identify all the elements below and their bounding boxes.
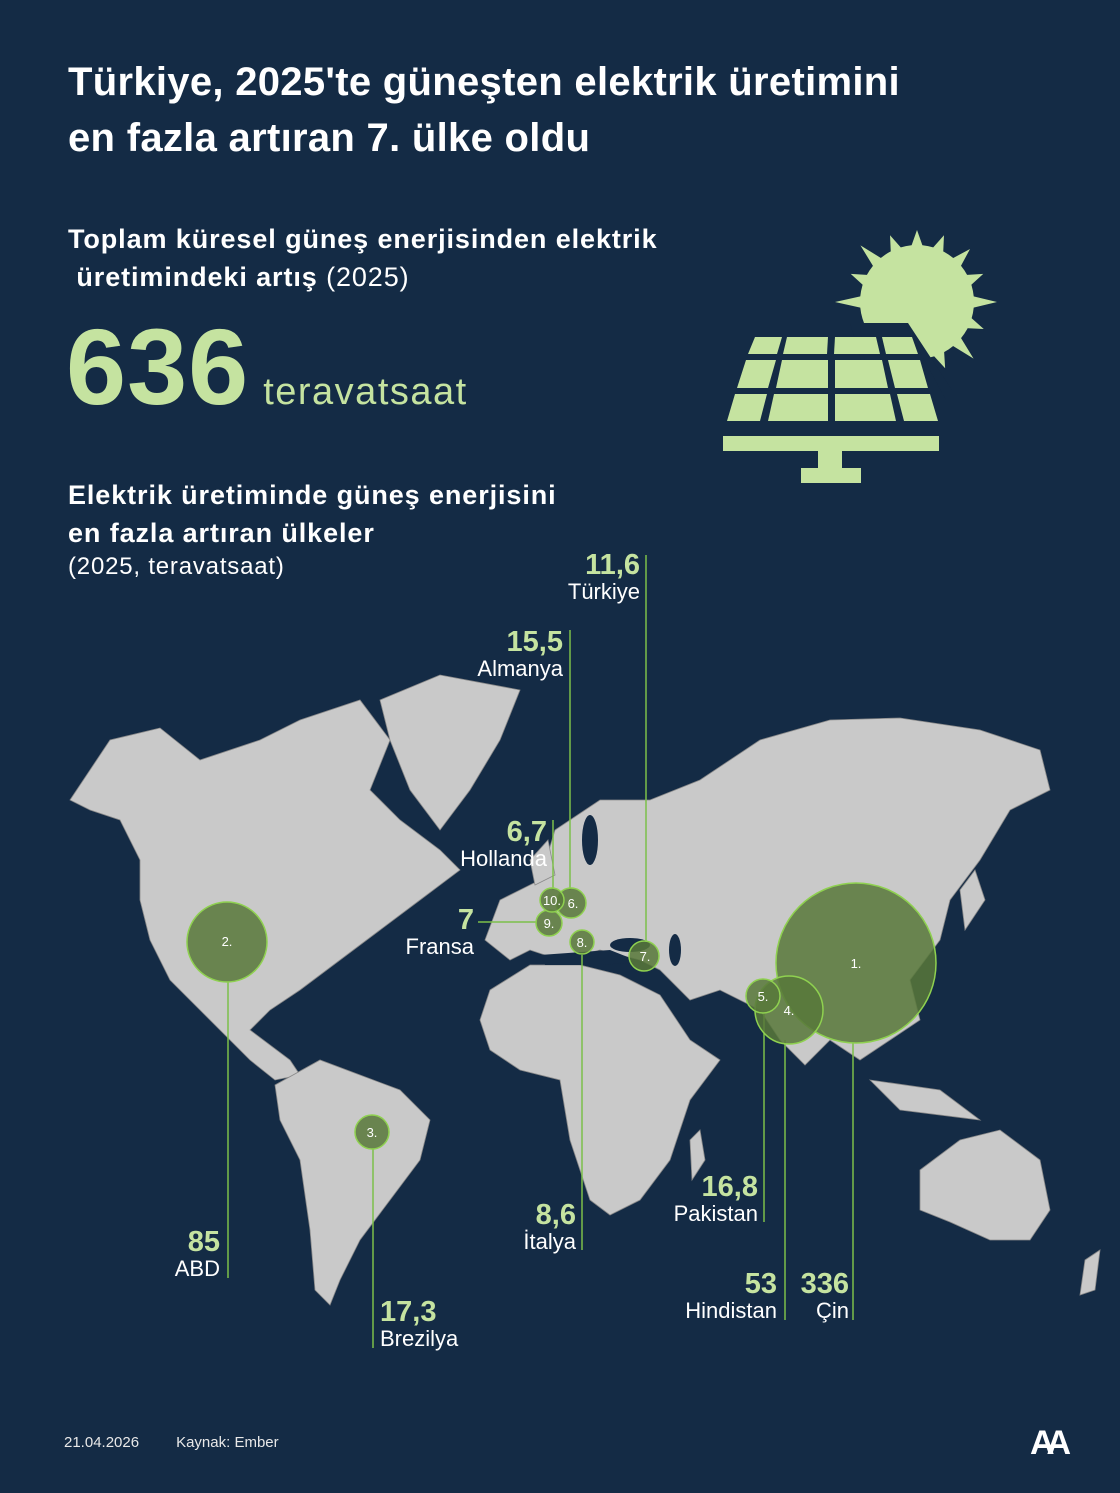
label: Pakistan bbox=[674, 1171, 758, 1226]
label: Hindistan: 53 bbox=[745, 1268, 777, 1300]
leader lines: 10. bbox=[543, 893, 561, 908]
label: Fransa: 7 bbox=[458, 904, 474, 936]
label: Fransa bbox=[406, 904, 474, 959]
label: ABD bbox=[174, 1226, 220, 1281]
subtitle: countries: Elektrik üretiminde güneş enerjisini bbox=[68, 480, 557, 510]
text: (2025, teravatsaat) bbox=[68, 553, 285, 580]
leader lines: 1. bbox=[851, 956, 861, 971]
leader lines: 6. bbox=[568, 896, 578, 911]
icon: AA logo: AA bbox=[1030, 1424, 1063, 1462]
label: Brezilya: 17,3 bbox=[380, 1296, 436, 1328]
label: ABD: 85 bbox=[188, 1226, 220, 1258]
icon: solar panel and sun bbox=[723, 230, 997, 483]
label: Hindistan: Hindistan bbox=[685, 1298, 777, 1323]
label: Hollanda: 6,7 bbox=[507, 816, 547, 848]
label: Almanya bbox=[477, 626, 563, 681]
label: Türkiye bbox=[568, 549, 640, 604]
title bbox=[68, 60, 900, 160]
title: en fazla artıran 7. ülke oldu bbox=[68, 116, 590, 160]
label: Hollanda bbox=[460, 816, 547, 871]
label: Cin: Çin bbox=[816, 1298, 849, 1323]
circles bbox=[187, 883, 936, 1149]
label: Hindistan bbox=[685, 1268, 777, 1323]
subtitle: countries: en fazla artıran ülkeler bbox=[68, 518, 375, 548]
leader lines: 5. bbox=[758, 989, 768, 1004]
label: Italya: 8,6 bbox=[536, 1199, 576, 1231]
label: Italya bbox=[523, 1199, 576, 1254]
label: Pakistan: 16,8 bbox=[702, 1171, 758, 1203]
leader lines: 7. bbox=[640, 949, 650, 964]
leader lines: 8. bbox=[577, 935, 587, 950]
title: Türkiye, 2025'te güneşten elektrik üretimini bbox=[68, 60, 900, 104]
big number: 636 teravatsaat bbox=[66, 306, 468, 427]
label: Türkiye: Türkiye bbox=[568, 579, 640, 604]
leader lines: 4. bbox=[784, 1003, 794, 1018]
label: Türkiye: 11,6 bbox=[585, 549, 640, 581]
label: Almanya: 15,5 bbox=[507, 626, 563, 658]
label: Almanya: Almanya bbox=[477, 656, 563, 681]
label: ABD: ABD bbox=[175, 1256, 220, 1281]
label: Hollanda: Hollanda bbox=[460, 846, 547, 871]
leader lines: 2. bbox=[222, 934, 232, 949]
label: Cin: 336 bbox=[801, 1268, 849, 1300]
subtitle: countries bbox=[68, 480, 557, 548]
subtitle: total increase: Toplam küresel güneş enerjisinden elektrik bbox=[68, 224, 658, 254]
label: Cin bbox=[801, 1268, 849, 1323]
label: Brezilya bbox=[380, 1296, 458, 1351]
subtitle: total increase: üretimindeki artış (2025) bbox=[76, 262, 410, 292]
leader lines: 9. bbox=[544, 916, 554, 931]
subtitle: total increase bbox=[68, 224, 658, 292]
leader lines: 3. bbox=[367, 1125, 377, 1140]
label: Brezilya: Brezilya bbox=[380, 1326, 458, 1351]
label: Fransa: Fransa bbox=[406, 934, 474, 959]
footer: 21.04.2026 Kaynak: Ember bbox=[64, 1434, 279, 1451]
label: Pakistan: Pakistan bbox=[674, 1201, 758, 1226]
label: Italya: İtalya bbox=[523, 1229, 576, 1254]
